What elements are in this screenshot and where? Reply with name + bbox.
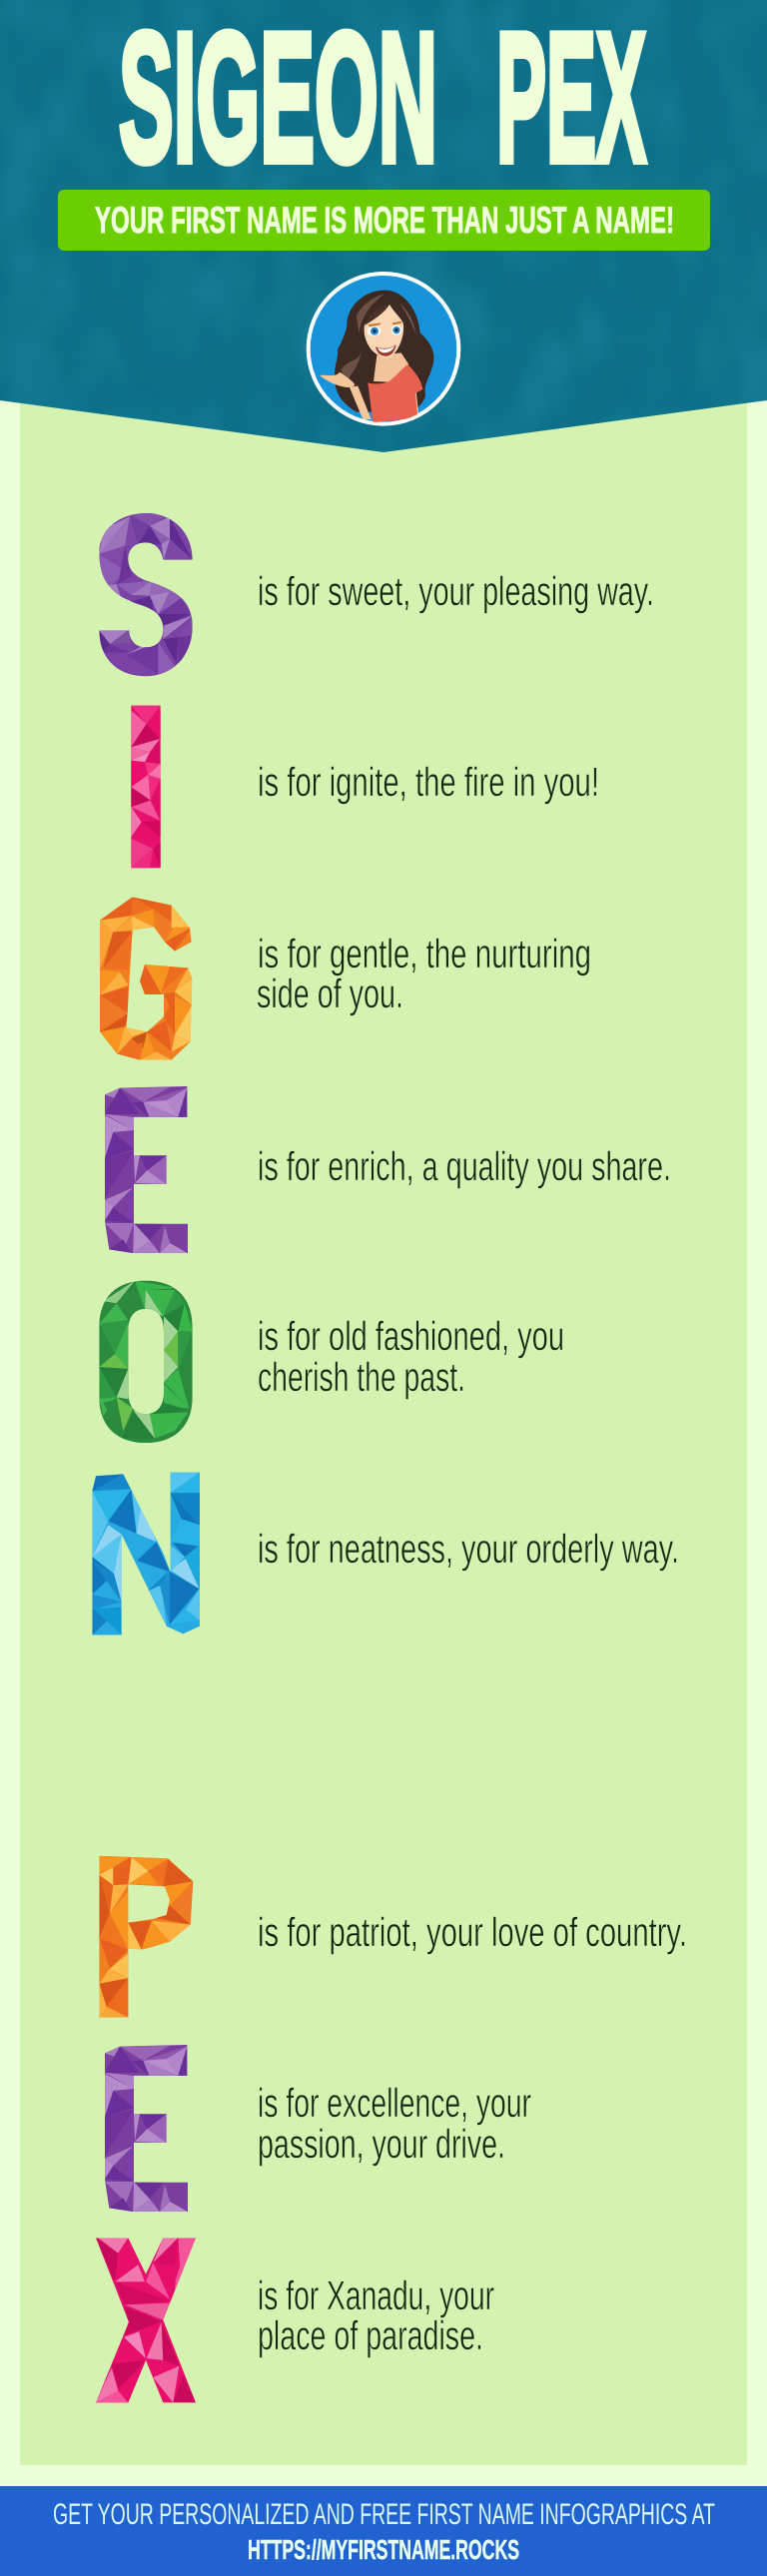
text: G lines: side of you. bbox=[257, 970, 403, 1016]
letter O bbox=[98, 1279, 195, 1444]
letter E bbox=[103, 1085, 190, 1254]
footer band bbox=[0, 2486, 767, 2576]
text: X lines: place of paradise. bbox=[258, 2312, 483, 2358]
footer text: HTTPS://MYFIRSTNAME.ROCKS bbox=[248, 2534, 519, 2565]
letter G bbox=[98, 896, 193, 1061]
text: O lines: cherish the past. bbox=[258, 1354, 465, 1400]
text: I line: is for ignite, the fire in you! bbox=[258, 759, 599, 805]
letter N bbox=[90, 1471, 202, 1637]
letter I bbox=[131, 706, 161, 868]
text: X lines bbox=[258, 2272, 494, 2358]
subtitle banner bbox=[58, 190, 710, 251]
text: O lines bbox=[258, 1313, 564, 1400]
text: X lines: is for Xanadu, your bbox=[258, 2272, 494, 2318]
footer text bbox=[53, 2498, 715, 2565]
text: second E lines: passion, your drive. bbox=[258, 2121, 505, 2167]
text: second E lines: is for excellence, your bbox=[258, 2080, 531, 2126]
text: G lines: is for gentle, the nurturing bbox=[258, 931, 591, 976]
text: G lines bbox=[257, 931, 591, 1016]
text: second E lines bbox=[258, 2080, 531, 2167]
letter S bbox=[97, 511, 195, 679]
letter E (second) bbox=[103, 2044, 190, 2213]
letter P bbox=[98, 1854, 195, 2019]
panel: letters background bbox=[20, 379, 747, 2465]
letter X bbox=[95, 2236, 197, 2404]
icon: avatar of woman in circle bbox=[307, 272, 460, 426]
text: O lines: is for old fashioned, you bbox=[258, 1313, 564, 1359]
header chevron band bbox=[0, 0, 767, 459]
